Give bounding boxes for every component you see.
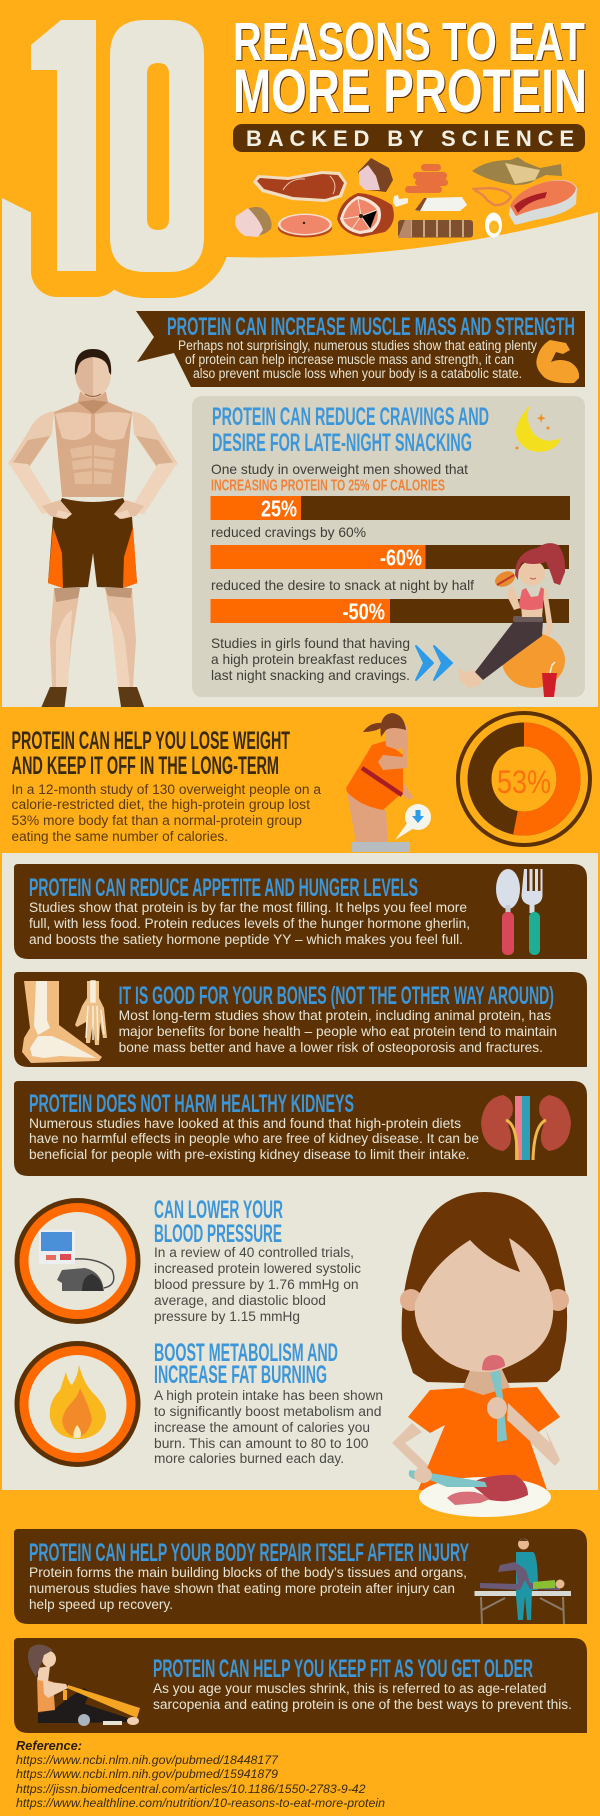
text: metabolism body — [154, 1388, 383, 1466]
abs — [70, 445, 116, 484]
shoulders and upper arms — [8, 411, 178, 472]
icon: spoon and fork — [496, 869, 542, 955]
references: Reference: — [16, 1739, 82, 1753]
text: blood pressure body: In a review of 40 controlled trials, — [154, 1245, 354, 1260]
forearms — [8, 462, 178, 514]
text: cravings reduction: reduced cravings by 60% — [211, 524, 366, 540]
icon: assorted meat and fish — [235, 157, 577, 238]
panel: repair after injury — [14, 1529, 587, 1624]
cream background — [2, 198, 598, 1490]
text: bones body: Most long-term studies show that protein, including animal protein, has — [119, 1008, 551, 1023]
text: metabolism body: burn. This can amount to 80 to 100 — [154, 1436, 368, 1451]
text: lose weight body: In a 12-month study of 130 overweight people on a — [12, 782, 321, 797]
text: blood pressure body: average, and diastolic blood — [154, 1293, 326, 1308]
text: kidneys body — [29, 1116, 479, 1162]
arms — [392, 1423, 430, 1470]
panel: kidneys — [14, 1081, 587, 1176]
left hand — [414, 1467, 432, 1483]
panel: muscle mass banner — [136, 311, 585, 387]
text: repair body — [29, 1565, 467, 1612]
illustration: girl on exercise ball — [457, 543, 565, 697]
text: muscle mass body: Perhaps not surprisingly, numerous studies show that eating plenty — [178, 338, 537, 353]
text: appetite body — [29, 900, 470, 947]
heading: lose weight: AND KEEP IT OFF IN THE LONG-TERM — [12, 752, 279, 780]
text: metabolism body: to significantly boost metabolism and — [154, 1404, 382, 1419]
arm to face — [378, 742, 408, 770]
chart: 53 percent donut — [458, 713, 590, 845]
legs — [38, 1688, 128, 1723]
text: appetite body: full, with less food. Protein reduces levels of the hunger hormone gherlin, — [29, 916, 470, 931]
text: keep fit body: sarcopenia and eating protein is one of the best ways to prevent this. — [153, 1697, 572, 1712]
shorts — [48, 498, 137, 588]
icon: moon — [516, 405, 561, 452]
heading: blood pressure: BLOOD PRESSURE — [154, 1220, 282, 1248]
title — [233, 12, 587, 125]
panel: keep fit — [14, 1638, 587, 1733]
heading: metabolism: BOOST METABOLISM AND — [154, 1339, 338, 1367]
bar chart: minus 60 percent: -60% — [380, 544, 422, 570]
heading: kidneys: PROTEIN DOES NOT HARM HEALTHY KIDNEYS — [29, 1090, 354, 1118]
face — [519, 560, 545, 586]
text: repair body: numerous studies have shown that eating more protein after injury can — [29, 1581, 455, 1596]
icon: kidneys — [481, 1095, 571, 1160]
arm — [43, 1680, 68, 1698]
panel: cravings — [192, 396, 585, 697]
ears — [400, 1289, 422, 1311]
references: https://www.ncbi.nlm.nih.gov/pubmed/15941879 — [16, 1767, 278, 1781]
panel: lose weight — [0, 707, 600, 853]
text: lose weight body — [12, 782, 321, 844]
references: https://jissn.biomedcentral.com/articles/10.1186/1550-2783-9-42 — [16, 1782, 366, 1796]
text: blood pressure body: blood pressure by 1.76 mmHg on — [154, 1277, 359, 1292]
panel: bones — [14, 972, 587, 1067]
text: breakfast study — [211, 635, 410, 683]
text: kidneys body: beneficial for people with pre-existing kidney disease to limit their intake. — [29, 1147, 470, 1162]
heading: lose weight: PROTEIN CAN HELP YOU LOSE WEIGHT — [12, 727, 290, 755]
sports top — [518, 587, 544, 610]
plate — [419, 1477, 551, 1517]
legs — [50, 588, 136, 687]
text: blood pressure body: pressure by 1.15 mmHg — [154, 1309, 300, 1324]
chart: 53 percent donut: 53% — [497, 764, 551, 800]
hands — [42, 500, 144, 519]
knife — [409, 1470, 487, 1487]
boots — [38, 687, 147, 722]
heading: metabolism — [154, 1339, 338, 1389]
cup — [542, 673, 557, 697]
roller and shoe — [78, 1714, 90, 1726]
text: lose weight body: 53% more body fat than a normal-protein group — [12, 813, 302, 828]
text: kidneys body: have no harmful effects in people who are free of kidney disease. It can be — [29, 1131, 479, 1146]
head — [75, 350, 111, 398]
references: https://www.ncbi.nlm.nih.gov/pubmed/18448177 — [16, 1753, 279, 1767]
legs — [347, 793, 388, 842]
text: study intro: One study in overweight men showed that — [211, 461, 468, 477]
foot — [127, 1717, 139, 1725]
text: muscle mass body: also prevent muscle loss when your body is a catabolic state. — [193, 366, 522, 381]
bar chart: minus 50 percent — [210, 598, 569, 624]
heading: cravings — [212, 403, 489, 457]
text: repair body: Protein forms the main building blocks of the body’s tissues and organs, — [29, 1565, 467, 1580]
text: highlighted statistic: INCREASING PROTEIN TO 25% OF CALORIES — [211, 478, 445, 494]
text: snacking reduction: reduced the desire to snack at night by half — [211, 577, 474, 593]
panel: appetite — [14, 864, 587, 959]
dress — [346, 741, 403, 810]
leggings — [475, 620, 543, 680]
text: metabolism body: more calories burned each day. — [154, 1451, 344, 1466]
icon: double chevron — [416, 646, 452, 680]
text: lose weight body: eating the same number of calories. — [12, 829, 228, 844]
text: appetite body: Studies show that protein is by far the most filling. It helps you feel more — [29, 900, 467, 915]
text: blood pressure body: increased protein lowered systolic — [154, 1261, 361, 1276]
references: https://www.healthline.com/nutrition/10-reasons-to-eat-more-protein — [16, 1796, 385, 1810]
text: appetite body: and boosts the satiety hormone peptide YY – which makes you feel full. — [29, 932, 463, 947]
fork — [490, 1370, 507, 1442]
text: breakfast study: Studies in girls found that having — [211, 635, 410, 651]
icon: flame badge — [14, 1341, 140, 1467]
text: muscle mass body — [178, 338, 537, 381]
neck — [463, 1365, 510, 1398]
text: lose weight body: calorie-restricted diet, the high-protein group lost — [12, 797, 310, 812]
subtitle pill: BACKED BY SCIENCE — [246, 126, 574, 151]
belly and far arm — [521, 588, 553, 636]
hair — [402, 1192, 567, 1383]
illustration: physiotherapist and patient — [474, 1538, 571, 1624]
bar chart: 25 percent: 25% — [261, 496, 297, 522]
head and hair — [42, 1651, 56, 1667]
references — [16, 1739, 385, 1810]
heading: lose weight — [12, 727, 290, 780]
illustration: girl eating meat — [392, 1192, 569, 1517]
text: breakfast study: a high protein breakfast reduces — [211, 651, 407, 667]
heading: metabolism: INCREASE FAT BURNING — [154, 1361, 327, 1389]
bar chart: minus 50 percent: -50% — [342, 598, 385, 624]
illustration: woman on scale — [346, 713, 431, 852]
icon: foot and hand bones — [22, 981, 107, 1063]
burger — [493, 568, 517, 590]
bar chart: 25 percent — [210, 496, 570, 522]
text: metabolism body: A high protein intake has been shown — [154, 1388, 383, 1403]
text: kidneys body: Numerous studies have looked at this and found that high-protein diets — [29, 1116, 461, 1131]
hair — [515, 543, 565, 585]
steak — [447, 1492, 493, 1505]
foot — [457, 667, 482, 688]
text: bones body — [119, 1008, 557, 1055]
icon: blood pressure monitor badge — [14, 1198, 140, 1324]
text: keep fit body: As you age your muscles shrink, this is referred to as age-related — [153, 1681, 546, 1696]
text: muscle mass body: of protein can help increase muscle mass and strength, it can — [185, 352, 514, 367]
illustration: woman stretching with band — [28, 1644, 140, 1726]
illustration: muscular man — [8, 349, 178, 722]
text: bones body: bone mass better and have a lower risk of osteoporosis and fractures. — [119, 1040, 543, 1055]
bar chart: minus 60 percent — [210, 544, 569, 570]
icon: flexed arm — [536, 340, 579, 383]
face — [415, 1238, 553, 1372]
bubble — [395, 822, 414, 840]
band — [63, 1685, 140, 1718]
torso — [37, 1677, 55, 1712]
heading: blood pressure: CAN LOWER YOUR — [154, 1196, 283, 1224]
right forearm over shirt — [507, 1403, 550, 1455]
text: keep fit body — [153, 1681, 572, 1712]
meat at mouth — [482, 1355, 505, 1370]
shirt — [408, 1387, 560, 1490]
hand — [487, 1397, 507, 1419]
near arm — [508, 586, 520, 610]
text: metabolism body: increase the amount of calories you — [154, 1420, 370, 1435]
scale — [352, 842, 410, 852]
text: repair body: help speed up recovery. — [29, 1597, 173, 1612]
text: breakfast study: last night snacking and cravings. — [211, 667, 410, 683]
text: bones body: major benefits for bone health – people who eat protein tend to maintain — [119, 1024, 557, 1039]
pecs — [55, 412, 131, 440]
head — [385, 726, 408, 750]
big number 10 — [31, 20, 204, 272]
neck and torso — [54, 392, 132, 497]
text: blood pressure body — [154, 1245, 361, 1324]
heading: blood pressure — [154, 1196, 283, 1248]
